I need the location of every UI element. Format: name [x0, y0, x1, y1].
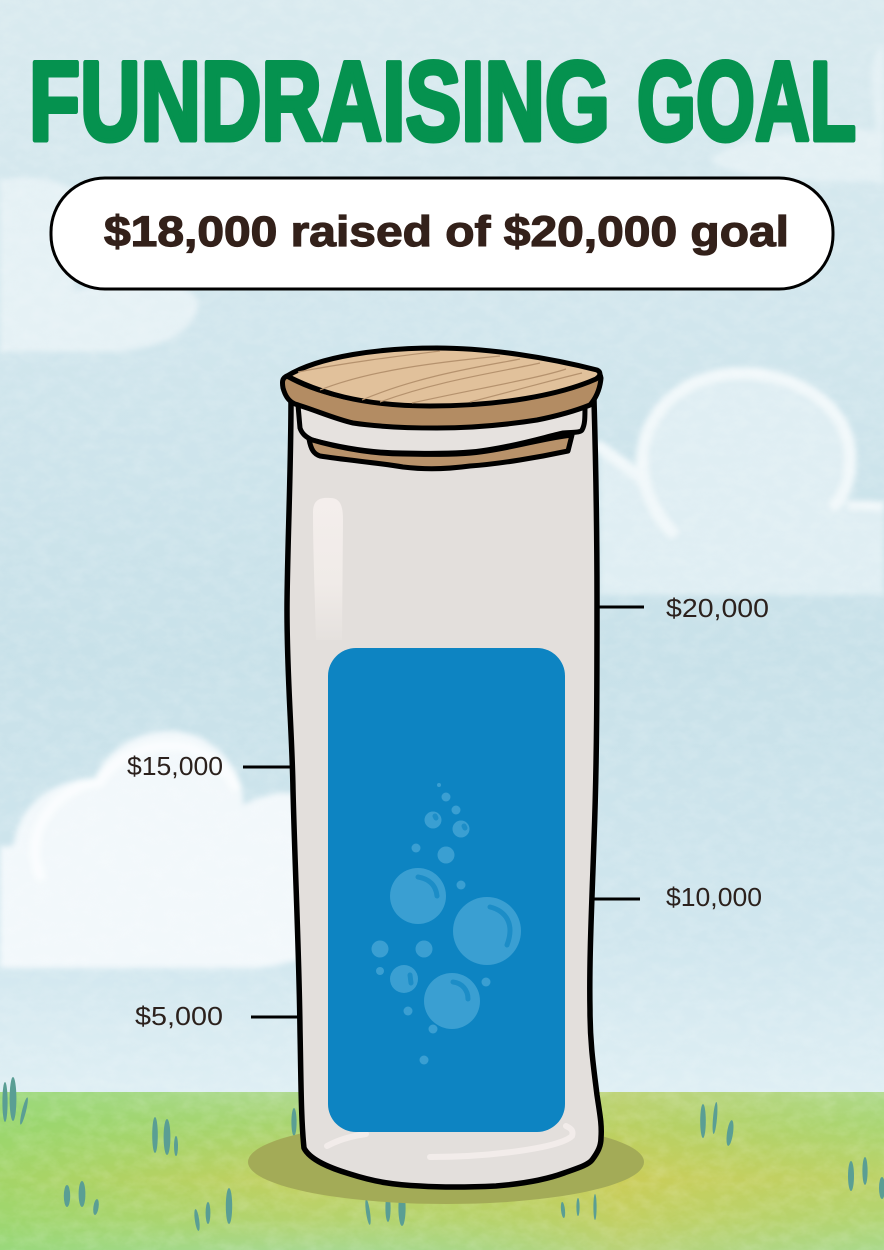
water fill: [328, 648, 565, 1132]
cloud: right: [600, 369, 884, 595]
title: FUNDRAISING: [29, 39, 610, 164]
label: $15,000: $15,000: [127, 751, 223, 781]
lid side: [282, 373, 601, 428]
ground: [0, 1092, 884, 1250]
label: $20,000: $20,000: [666, 593, 769, 623]
progress pill: [51, 178, 833, 289]
cloud: left: [0, 731, 300, 968]
cloud: top right: [710, 45, 884, 182]
jar neck: [298, 405, 585, 453]
jar: [282, 348, 601, 1187]
grass tufts: [2, 1077, 884, 1231]
jar shadow: [248, 1120, 644, 1204]
label: $10,000: $10,000: [666, 882, 762, 912]
jar body: [287, 400, 601, 1187]
lid top: [287, 348, 600, 406]
label: $5,000: $5,000: [135, 1001, 223, 1031]
cloud: top left: [0, 178, 198, 352]
progress text: $18,000 raised of $20,000 goal: [104, 208, 789, 256]
jar highlights: [313, 498, 573, 1157]
bubbles: [372, 783, 521, 1064]
wood grain: [298, 351, 582, 403]
lid lower rim: [309, 435, 572, 469]
